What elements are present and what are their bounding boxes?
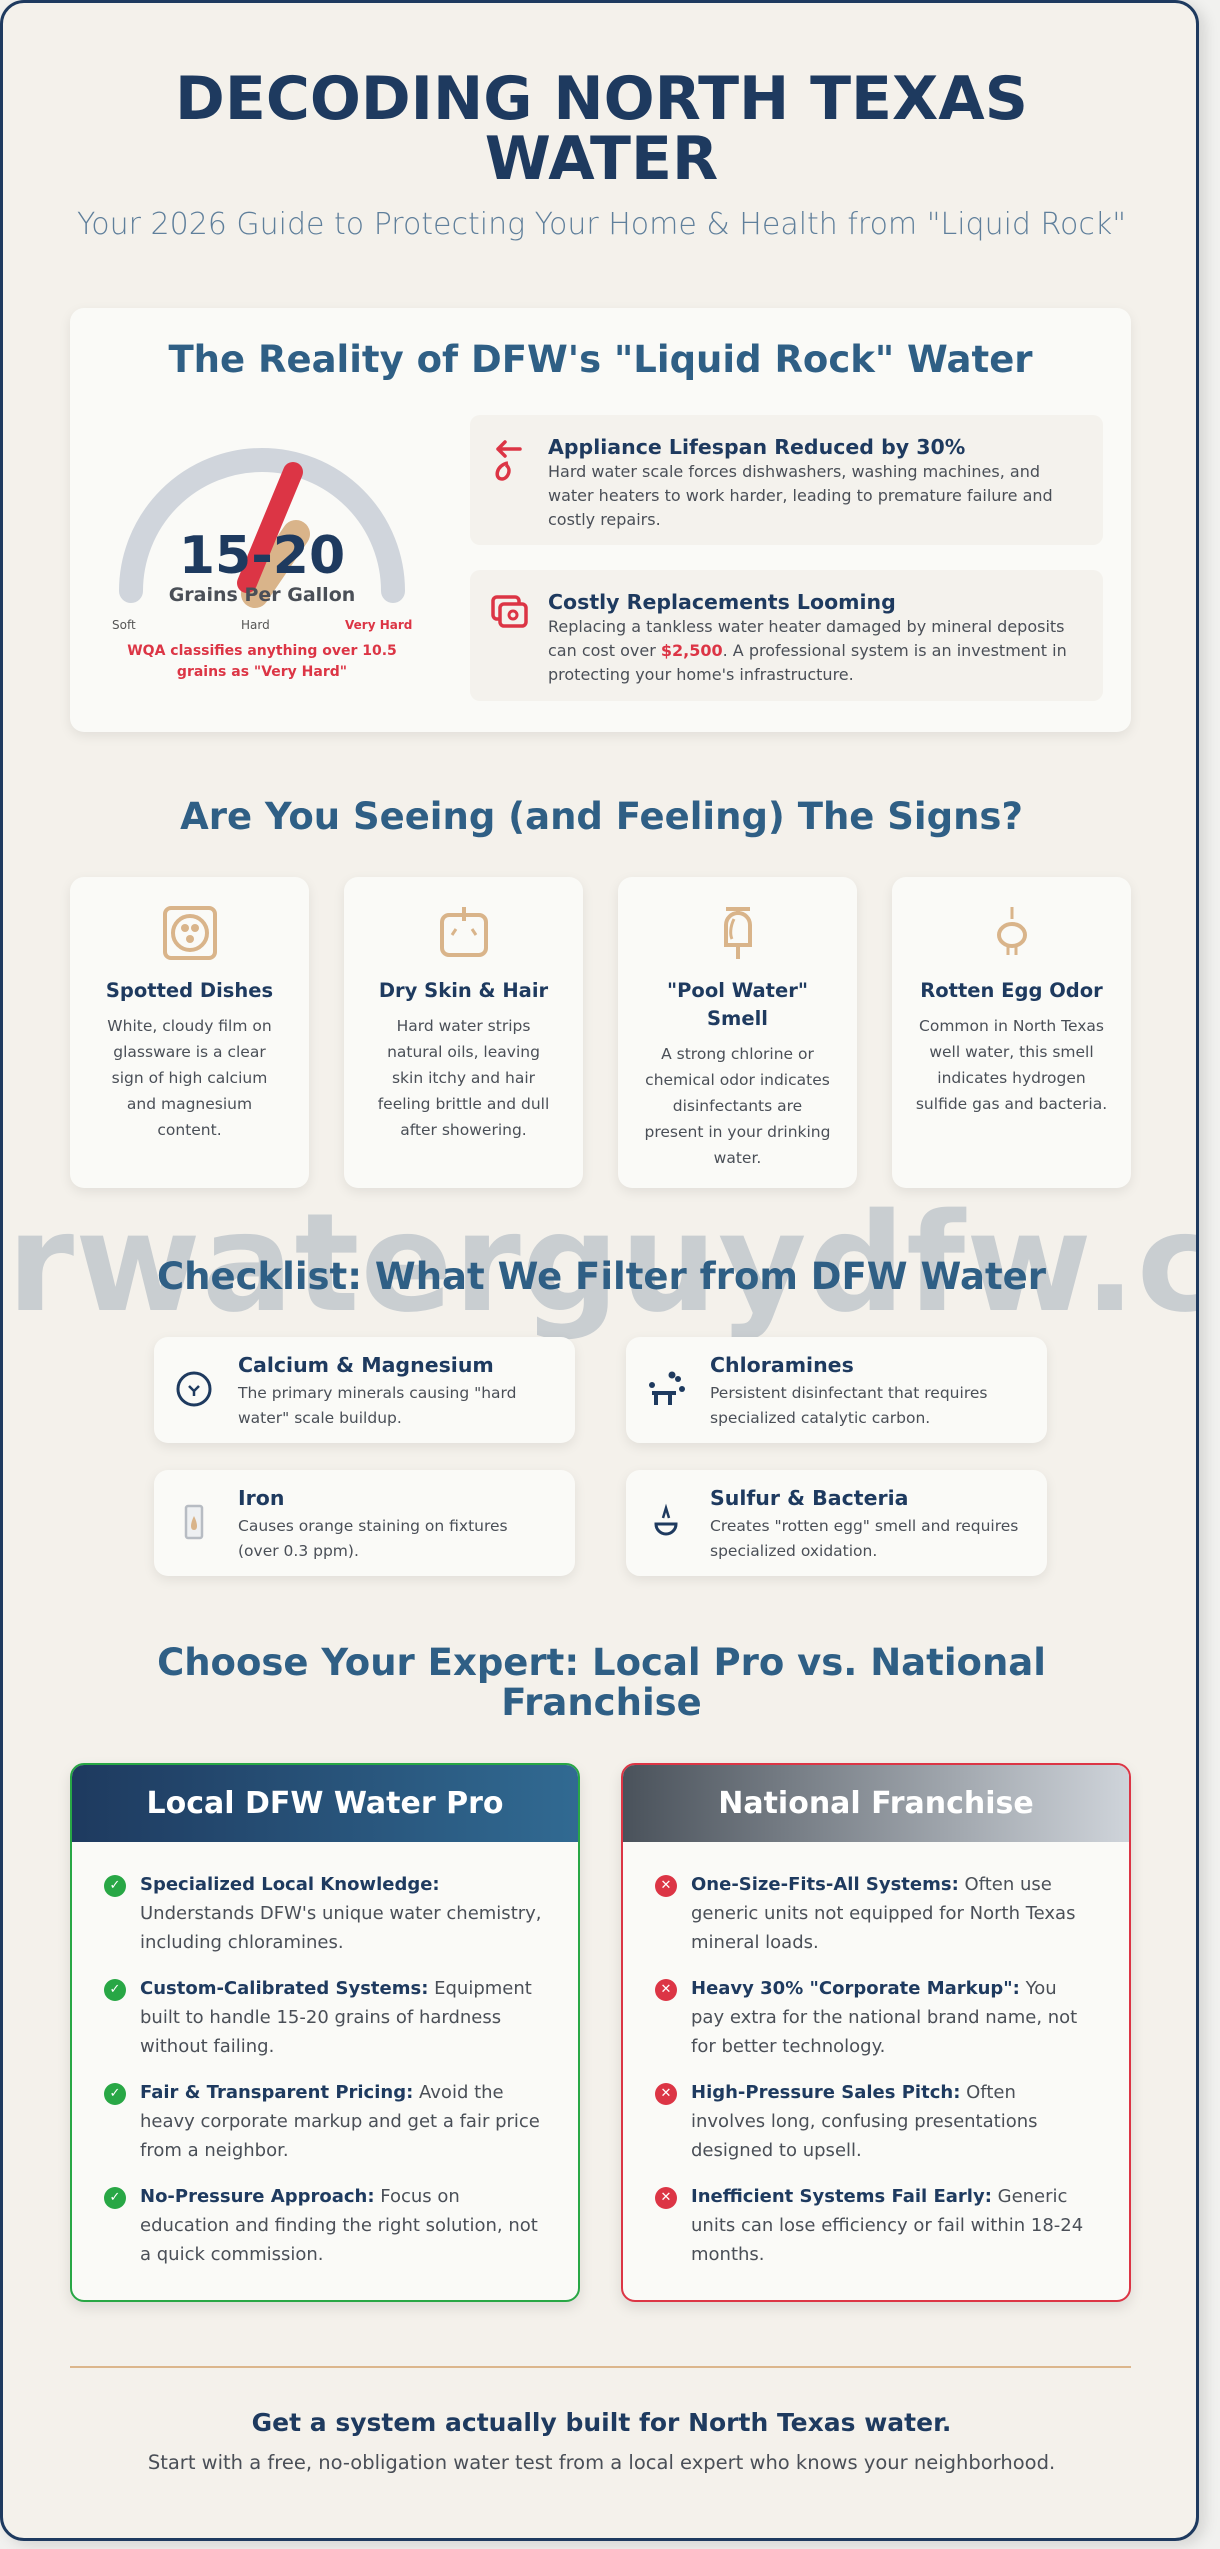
checklist item: iron: Causes orange staining on fixtures (over 0.3 ppm).: [238, 1517, 508, 1560]
heading: signs: Are You Seeing (and Feeling) The Signs?: [180, 795, 1023, 838]
checklist item: chloramines: Chloramines: [710, 1353, 854, 1377]
heading: checklist: Checklist: What We Filter from DFW Water: [157, 1255, 1046, 1298]
icon: dish: [163, 906, 217, 960]
panel: national franchise: ✕: [661, 2190, 671, 2205]
icon: skin: [440, 907, 488, 957]
panel: liquid rock: [70, 308, 1131, 732]
box: appliance lifespan: Appliance Lifespan Reduced by 30%: [548, 435, 965, 459]
item: One-Size-Fits-All Systems: Often use generic units not equipped for North Texas mineral loads.: [691, 1874, 1075, 1953]
gauge labels: Hard: [241, 618, 270, 632]
item: High-Pressure Sales Pitch: Often involves long, confusing presentations designed to upsell.: [691, 2082, 1038, 2161]
title: WATER: [485, 124, 718, 194]
gauge chart: [119, 448, 405, 608]
checklist item: iron: [154, 1470, 575, 1576]
checklist item: chloramines: [626, 1337, 1047, 1443]
checklist item: calcium: The primary minerals causing "hard water" scale buildup.: [238, 1384, 516, 1427]
card: dry skin: Hard water strips natural oils, leaving skin itchy and hair feeling brittle and dull after showering.: [378, 1017, 549, 1139]
title: DECODING NORTH TEXAS: [175, 64, 1028, 134]
checklist item: iron: Iron: [238, 1486, 284, 1510]
card: spotted dishes: White, cloudy film on glassware is a clear sign of high calcium and magnesium content.: [107, 1017, 272, 1139]
header: local: [72, 1765, 578, 1842]
box: costly replacements: Costly Replacements Looming: [548, 590, 896, 614]
checklist item: chloramines: Persistent disinfectant that requires specialized catalytic carbon.: [710, 1384, 987, 1427]
icon: mineral: [176, 1372, 212, 1406]
checklist item: sulfur: Creates "rotten egg" smell and requires specialized oxidation.: [710, 1517, 1018, 1560]
card: spotted dishes: [70, 877, 309, 1188]
panel: local pro: ✓: [110, 1878, 120, 1893]
icon: iron: [184, 1504, 204, 1540]
heading: reality: The Reality of DFW's "Liquid Rock" Water: [168, 338, 1033, 381]
card: dry skin: Dry Skin & Hair: [379, 979, 548, 1002]
item: Heavy 30% "Corporate Markup": You pay extra for the national brand name, not for better technology.: [691, 1978, 1077, 2057]
card: pool water: Smell: [707, 1007, 768, 1030]
gauge labels: Soft: [112, 618, 136, 632]
box: appliance lifespan: [470, 415, 1103, 545]
checklist item: calcium: [154, 1337, 575, 1443]
panel: national franchise: [621, 1763, 1131, 2302]
icon: money: [491, 595, 528, 628]
checklist item: calcium: Calcium & Magnesium: [238, 1353, 494, 1377]
CTA heading: Get a system actually built for North Texas water.: [252, 2408, 951, 2437]
item: No-Pressure Approach: Focus on education and finding the right solution, not a quick commission.: [140, 2186, 538, 2265]
card: rotten egg: [892, 877, 1131, 1188]
panel: local pro: ✓: [110, 2190, 120, 2205]
heading: choose expert: [157, 1641, 1046, 1724]
panel: local pro: ✓: [110, 1982, 120, 1997]
panel: national franchise: ✕: [661, 1878, 671, 1893]
box: costly replacements: Replacing a tankless water heater damaged by mineral deposits can cost over $2,500. A professional system is an investment in protecting your home's infrastructure.: [548, 617, 1067, 684]
item: Fair & Transparent Pricing: Avoid the heavy corporate markup and get a fair price from a neighbor.: [140, 2082, 540, 2161]
box: costly replacements: [470, 570, 1103, 701]
item: Custom-Calibrated Systems: Equipment built to handle 15-20 grains of hardness without failing.: [140, 1978, 532, 2057]
heading: choose expert: Choose Your Expert: Local Pro vs. National: [157, 1641, 1046, 1684]
panel: local pro: [70, 1763, 580, 2302]
WQA note: WQA classifies anything over 10.5 grains as "Very Hard": [127, 643, 397, 680]
card: pool water: A strong chlorine or chemical odor indicates disinfectants are present in your drinking water.: [644, 1045, 830, 1167]
card: rotten egg: Common in North Texas well water, this smell indicates hydrogen sulfide gas and bacteria.: [916, 1017, 1107, 1113]
title: [175, 64, 1028, 194]
card: rotten egg: Rotten Egg Odor: [920, 979, 1103, 1002]
card: pool water: [618, 877, 857, 1188]
gauge value: 15-20: [179, 526, 345, 586]
item: Specialized Local Knowledge: Understands DFW's unique water chemistry, including chloramines.: [140, 1874, 542, 1953]
icon: faucet: [724, 907, 752, 959]
checklist item: sulfur: [626, 1470, 1047, 1576]
checklist item: sulfur: Sulfur & Bacteria: [710, 1486, 908, 1510]
card: pool water: "Pool Water": [667, 979, 808, 1002]
panel: national franchise: ✕: [661, 1982, 671, 1997]
box: appliance lifespan: Hard water scale forces dishwashers, washing machines, and water heaters to work harder, leading to premature failure and costly repairs.: [548, 462, 1053, 529]
subtitle: Your 2026 Guide to Protecting Your Home & Health from "Liquid Rock": [77, 207, 1126, 242]
icon: chemical: [649, 1372, 685, 1405]
icon: egg: [997, 907, 1027, 955]
panel: local pro: ✓: [110, 2086, 120, 2101]
card: spotted dishes: Spotted Dishes: [106, 979, 273, 1002]
gauge labels: [112, 618, 412, 632]
CTA text: Start with a free, no-obligation water test from a local expert who knows your neighborhood.: [148, 2451, 1055, 2474]
header: national: [623, 1765, 1129, 1842]
panel: national franchise: ✕: [661, 2086, 671, 2101]
heading: choose expert: Franchise: [501, 1681, 702, 1724]
gauge unit: Grains Per Gallon: [169, 584, 355, 606]
icon: arrow: [495, 440, 522, 481]
header: local: Local DFW Water Pro: [146, 1786, 504, 1821]
header: national: National Franchise: [718, 1786, 1034, 1821]
gauge labels: Very Hard: [345, 618, 412, 632]
item: Inefficient Systems Fail Early: Generic units can lose efficiency or fail within 18-24 months.: [691, 2186, 1083, 2265]
icon: sulfur: [654, 1504, 678, 1536]
card: dry skin: [344, 877, 583, 1188]
